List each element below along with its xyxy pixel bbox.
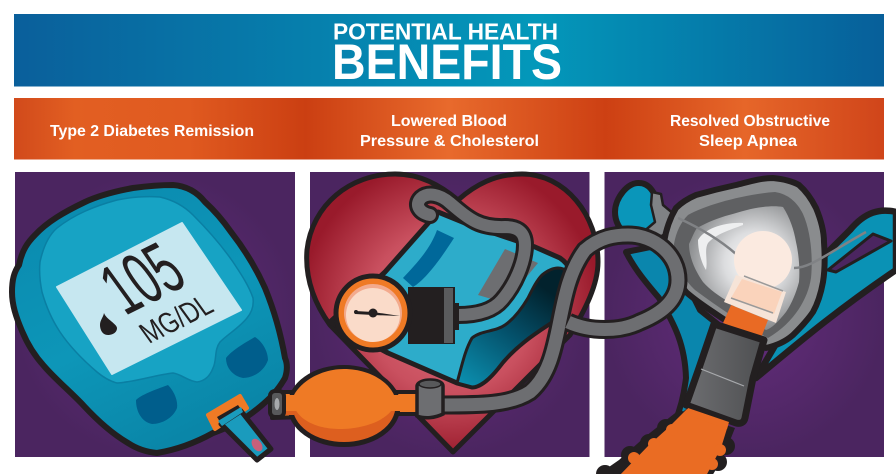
mask highlight [698, 223, 743, 270]
nasal cushion [724, 231, 792, 323]
icon: blood glucose meter [12, 185, 287, 460]
panel: heart background [310, 172, 590, 457]
unit mg/dl: MG/DL [133, 288, 219, 349]
corrugated orange hose [596, 408, 735, 474]
icon: blood pressure cuff [270, 195, 571, 444]
straps across mask [678, 218, 866, 268]
title text: benefits: BENEFITS [332, 34, 562, 90]
right button [226, 337, 268, 378]
label: sleep apnea: Resolved Obstructive [670, 113, 830, 130]
label: blood pressure [360, 113, 539, 150]
label: diabetes: Type 2 Diabetes Remission [50, 123, 254, 140]
hose connector [686, 324, 764, 423]
label: blood pressure: Pressure & Cholesterol [360, 133, 539, 150]
reading 105: 105 [85, 229, 200, 330]
test strip [208, 396, 271, 460]
left headgear strap [626, 245, 725, 422]
cuff label [478, 249, 538, 303]
icon: heart [307, 174, 598, 452]
panel: meter background [15, 172, 295, 457]
bulb end cap [270, 391, 284, 417]
gauge dial [336, 276, 410, 350]
meter screen [57, 223, 241, 374]
cuff body [330, 212, 571, 387]
valve [417, 380, 443, 418]
title banner [14, 14, 884, 90]
cuff stripe [403, 230, 454, 287]
label: sleep apnea [670, 113, 830, 150]
gauge block [408, 287, 459, 344]
main tube from valve looping over mask [442, 235, 678, 405]
left button [136, 385, 177, 424]
left top strap blob [615, 183, 660, 240]
inflation bulb [270, 368, 418, 444]
mask shell [664, 178, 825, 348]
title text: potential health: POTENTIAL HEALTH [333, 18, 558, 44]
left strap tab [642, 192, 675, 240]
meter bezel [40, 197, 253, 383]
mask inner band [674, 192, 812, 338]
right headgear strap [756, 211, 896, 378]
hose top band [685, 408, 729, 429]
tube from gauge to cuff [418, 195, 525, 315]
cuff opening [457, 268, 570, 387]
label: sleep apnea: Sleep Apnea [699, 133, 797, 150]
meter body [12, 185, 287, 453]
mask dome [689, 206, 799, 330]
blood drop icon [100, 313, 117, 335]
orange label banner [14, 98, 884, 160]
orange collar [723, 305, 768, 338]
label: blood pressure: Lowered Blood [391, 113, 507, 130]
panel: mask background [604, 172, 884, 457]
icon: cpap mask [596, 178, 896, 474]
